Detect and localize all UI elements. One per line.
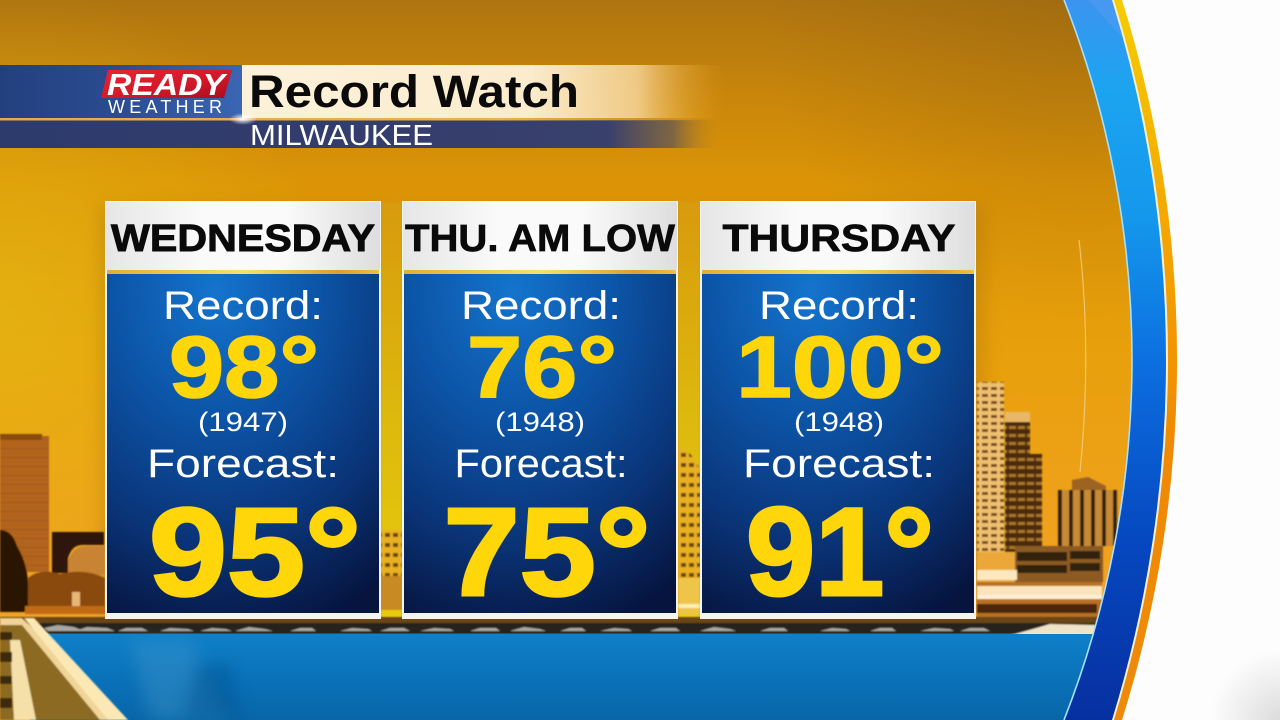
record year: (1948) (495, 407, 585, 437)
forecast value: 91° (746, 483, 934, 622)
banner: cream title bar (242, 65, 724, 118)
panel shadow glow behind cards (100, 205, 986, 615)
logo: Ready Weather (101, 67, 232, 117)
skyline: right towers and lakefront (977, 382, 1118, 624)
panel: Wednesday (105, 201, 381, 622)
record label: Record: (759, 284, 919, 328)
panel header (106, 202, 380, 270)
title banner (0, 65, 724, 152)
day label: WEDNESDAY (111, 218, 375, 260)
record label: Record: (461, 284, 621, 328)
day label: THU. AM LOW (405, 218, 675, 260)
record value: 100° (736, 319, 944, 416)
skyline: gap buildings between cards (381, 201, 700, 621)
forecast label: Forecast: (147, 442, 339, 486)
logo: Ready Weather: READY (107, 67, 229, 102)
forecast label: Forecast: (743, 442, 935, 486)
pier walkway (0, 618, 128, 720)
lake water (30, 634, 1120, 720)
day label: THURSDAY (722, 218, 956, 260)
heading: Record Watch: Record Watch (249, 66, 579, 117)
banner: gold rule (0, 118, 724, 120)
panel: Thu. AM Low (402, 201, 678, 622)
forecast value: 95° (149, 483, 361, 622)
shoreline (0, 617, 1110, 640)
faint light arc in sky (1079, 240, 1086, 472)
banner: location strip (0, 120, 724, 148)
logo: Ready Weather: WEATHER (108, 97, 222, 117)
skyline: left buildings (0, 434, 110, 614)
forecast value: 75° (444, 483, 650, 622)
subheading: Milwaukee: MILWAUKEE (250, 120, 433, 152)
panel: Thursday (700, 201, 976, 622)
curved orange band (1112, 0, 1280, 720)
panel header (403, 202, 677, 270)
banner: blue logo block (0, 65, 242, 118)
banner: sparkle (229, 113, 257, 125)
record year: (1948) (794, 407, 884, 437)
record value: 98° (169, 319, 319, 416)
panel header (701, 202, 975, 270)
curved blue broadcast band (1064, 0, 1280, 720)
record label: Record: (163, 284, 323, 328)
white right-hand area (1122, 0, 1280, 720)
forecast label: Forecast: (454, 442, 628, 486)
record year: (1947) (198, 407, 288, 437)
record value: 76° (467, 319, 617, 416)
